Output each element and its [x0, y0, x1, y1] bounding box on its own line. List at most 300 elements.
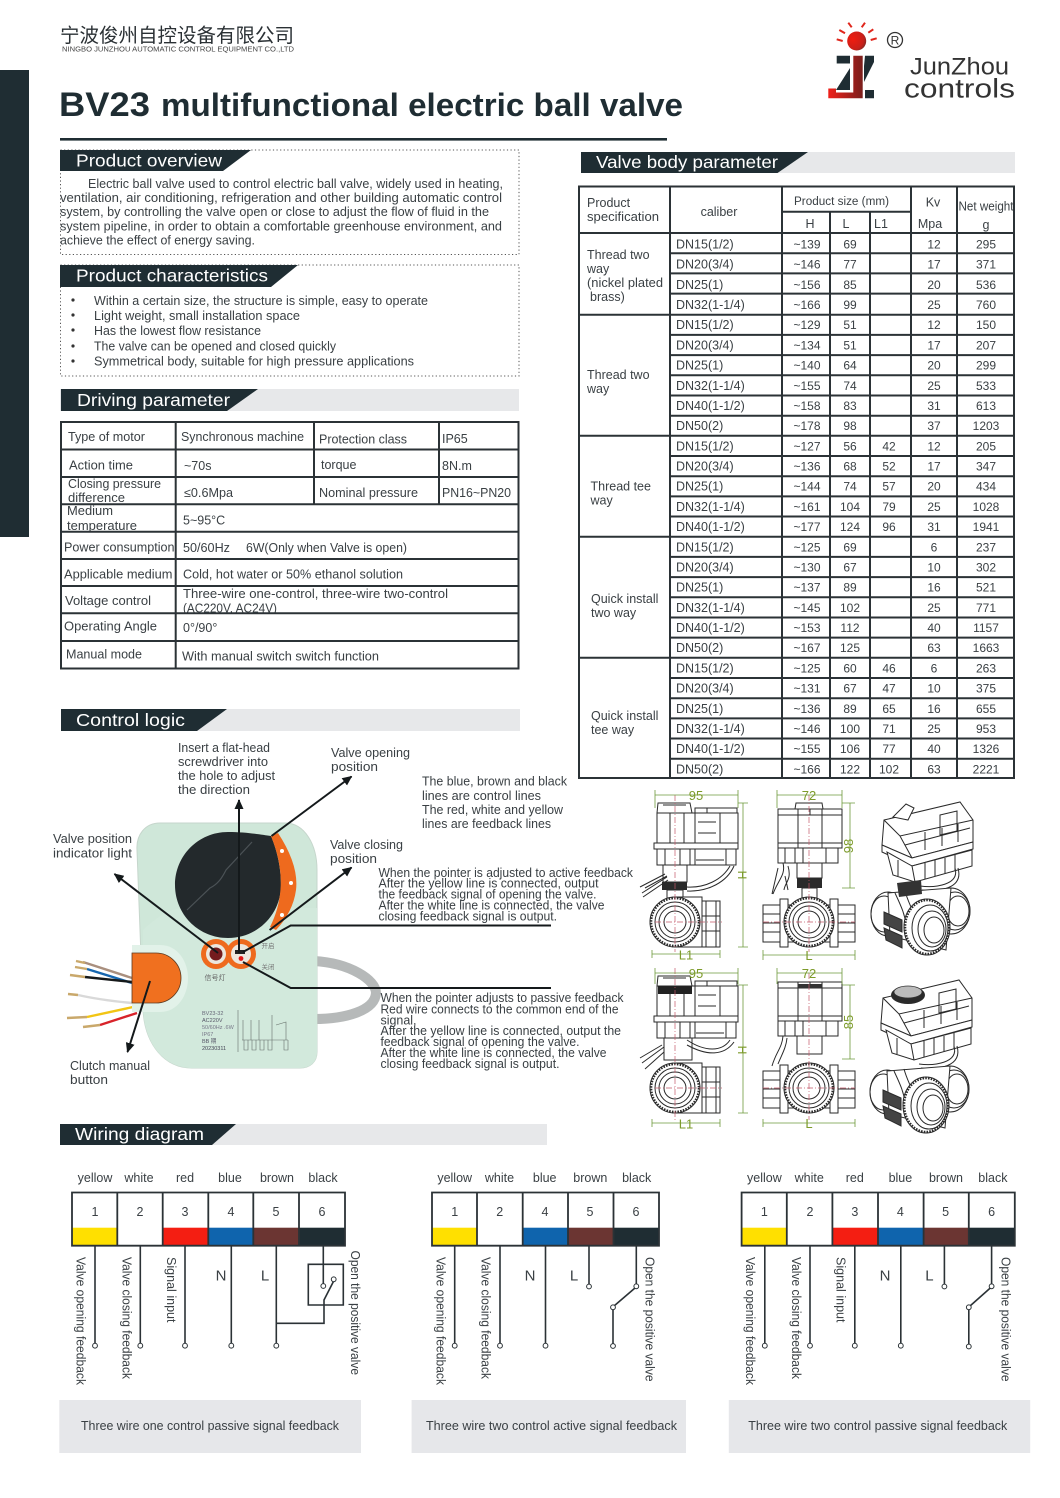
- net weight column: 1941: [973, 520, 1000, 534]
- H column: ~134: [793, 338, 821, 352]
- H column: ~131: [793, 682, 821, 696]
- caliber column: DN50(2): [676, 641, 723, 655]
- overview text: Electric ball valve used to control electric ball valve, widely used in heating,: [88, 177, 503, 191]
- table header: Kv: [926, 196, 941, 210]
- table header: [587, 196, 1014, 232]
- icon: sun: [837, 23, 877, 50]
- net weight column: 207: [976, 338, 996, 352]
- Kv column: 25: [927, 379, 941, 393]
- product specification labels: way: [586, 382, 610, 396]
- vertical labels: [74, 1250, 362, 1386]
- vertical labels: Open the positive valve: [642, 1257, 656, 1382]
- L column: 67: [843, 682, 857, 696]
- N and L labels: L: [570, 1268, 578, 1284]
- caliber column: DN20(3/4): [676, 560, 734, 574]
- caption bar: [59, 1400, 361, 1453]
- company name: NINGBO JUNZHOU AUTOMATIC CONTROL EQUIPMENT CO.,LTD: [62, 46, 294, 54]
- H column: ~155: [793, 742, 821, 756]
- Kv column: 16: [927, 702, 941, 716]
- H column: ~155: [793, 379, 821, 393]
- L1 column: 96: [882, 520, 896, 534]
- text: passive feedback note: Red wire connects to the common end of the: [380, 1002, 619, 1016]
- product specification labels: [586, 248, 663, 737]
- H column: ~130: [793, 560, 821, 574]
- H column: ~136: [793, 460, 821, 474]
- drawing: front view, knob version: 98: [841, 839, 856, 853]
- H column: ~161: [793, 500, 821, 514]
- device small labels: 20230311: [202, 1046, 226, 1052]
- table: driving parameter: Manual mode: [66, 648, 142, 662]
- net weight column: 1028: [973, 500, 1000, 514]
- table: driving parameter: Operating Angle: [64, 620, 157, 634]
- product specification labels: brass): [590, 290, 625, 304]
- H column: ~177: [793, 520, 821, 534]
- table: driving parameter: Voltage control: [65, 594, 151, 608]
- L1 column: 42: [882, 439, 896, 453]
- text: active feedback note: closing feedback signal is output.: [378, 910, 557, 924]
- caption bar: Three wire two control active signal feedback: [426, 1419, 678, 1433]
- table header: Product size (mm): [794, 196, 889, 208]
- caliber column: DN25(1): [676, 702, 723, 716]
- drawing: side view, dial version: [640, 966, 749, 1132]
- H column: ~125: [793, 661, 821, 675]
- L column: 74: [843, 480, 857, 494]
- wire colour names: yellow: [437, 1171, 473, 1185]
- Kv column: 16: [927, 581, 941, 595]
- caption bar: [729, 1400, 1030, 1453]
- L column: 124: [840, 520, 860, 534]
- Kv column: 25: [927, 500, 941, 514]
- caliber column: [676, 238, 745, 776]
- wiring diagram 2: [412, 1171, 686, 1453]
- Kv column: 20: [927, 480, 941, 494]
- caliber column: DN32(1-1/4): [676, 722, 745, 736]
- Kv column: 17: [927, 258, 941, 272]
- wires: [67, 961, 137, 1027]
- text: indicator light: indicator light: [53, 846, 133, 860]
- caliber column: DN25(1): [676, 278, 723, 292]
- net weight column: 1663: [973, 641, 1000, 655]
- net weight column: 1203: [973, 419, 1000, 433]
- arrows: control logic callouts: [114, 776, 551, 1052]
- caliber column: DN20(3/4): [676, 258, 734, 272]
- table: driving parameter: 5~95°C: [183, 514, 225, 528]
- panel: product overview: [60, 150, 519, 254]
- Kv column: 25: [927, 298, 941, 312]
- icon: registered mark: R: [891, 34, 900, 48]
- title: multifunctional electric ball valve: [161, 87, 683, 123]
- net weight column: 434: [976, 480, 996, 494]
- device small labels: BV23-32: [202, 1011, 223, 1017]
- table header: L1: [874, 217, 888, 231]
- wire colour names: yellow: [78, 1171, 113, 1185]
- vertical labels: Valve closing feedback: [120, 1257, 134, 1380]
- table: driving parameter: 0°/90°: [183, 621, 217, 635]
- overview text: system, by controlling the valve open or close to adjust the flow of fluid in the: [60, 205, 489, 219]
- H column: ~140: [793, 359, 821, 373]
- H column: ~158: [793, 399, 821, 413]
- table: driving parameter: temperature: [67, 519, 137, 533]
- L column: 51: [843, 318, 857, 332]
- terminal block: 1: [761, 1205, 768, 1219]
- net weight column: 771: [976, 601, 996, 615]
- caliber column: DN50(2): [676, 419, 723, 433]
- H column: ~136: [793, 702, 821, 716]
- table: driving parameter: Synchronous machine: [181, 430, 304, 444]
- vertical labels: Valve closing feedback: [789, 1257, 803, 1380]
- wire colour names: black: [308, 1171, 338, 1185]
- table: driving parameter: 6W(Only when Valve is open): [246, 541, 407, 555]
- L1 column: 46: [882, 661, 896, 675]
- terminal block: 6: [319, 1205, 326, 1219]
- N and L labels: N: [216, 1268, 226, 1284]
- net weight column: 347: [976, 460, 996, 474]
- caliber column: DN20(3/4): [676, 460, 734, 474]
- Kv column: 40: [927, 621, 941, 635]
- L1 column: 65: [882, 702, 896, 716]
- Kv column: 20: [927, 278, 941, 292]
- terminal block: 1: [92, 1205, 99, 1219]
- left side bar: [0, 70, 29, 537]
- drawing: front view, knob version: L: [805, 948, 813, 963]
- text: clutch manual button: Clutch manual: [70, 1059, 150, 1073]
- terminal block: 3: [851, 1205, 858, 1219]
- vertical labels: Signal input: [834, 1257, 848, 1323]
- orange clutch button: [132, 953, 181, 1003]
- caliber column: DN40(1-1/2): [676, 621, 745, 635]
- L column: 112: [840, 621, 860, 635]
- table header: g: [983, 218, 990, 232]
- drawing: isometric view, dial version: [870, 980, 972, 1133]
- caliber column: DN15(1/2): [676, 238, 734, 252]
- table: driving parameter: 8N.m: [442, 459, 472, 473]
- drawing: front view, dial version: 72: [802, 966, 816, 981]
- drawing: isometric view, knob version: [871, 802, 973, 955]
- drawing: side view, dial version: L1: [679, 1116, 693, 1132]
- text: wire colour note: lines are control lines: [422, 789, 541, 803]
- Kv column: 25: [927, 722, 941, 736]
- Kv column: 12: [927, 238, 941, 252]
- wires and switch: [452, 1246, 639, 1348]
- H column: ~153: [793, 621, 821, 635]
- Kv column: 31: [927, 520, 941, 534]
- caption bar: [412, 1400, 686, 1453]
- H column: ~137: [793, 581, 821, 595]
- text: valve opening position: position: [331, 760, 378, 774]
- device small labels: IP67: [202, 1032, 213, 1038]
- wire colour names: red: [176, 1171, 194, 1185]
- net weight column: 533: [976, 379, 996, 393]
- drawing: front view, dial version: [763, 966, 856, 1131]
- L column: 56: [843, 439, 857, 453]
- heading: wiring diagram: Wiring diagram: [75, 1124, 204, 1144]
- device small labels: [202, 941, 288, 1052]
- Kv column: [927, 238, 941, 776]
- L column: 98: [843, 419, 857, 433]
- terminal block: 4: [228, 1205, 235, 1219]
- table header: Mpa: [918, 217, 942, 231]
- table header: L: [843, 217, 850, 231]
- L column: [840, 238, 860, 776]
- heading: product characteristics: Product characteristics: [76, 266, 268, 286]
- text: passive feedback note: [380, 991, 624, 1071]
- wire colour names: [78, 1171, 338, 1185]
- wire colour names: brown: [573, 1171, 607, 1185]
- actuator device illustration: [67, 823, 376, 1068]
- net weight column: 302: [976, 560, 996, 574]
- net weight column: 536: [976, 278, 996, 292]
- device small labels: 关闭: [262, 962, 274, 971]
- wires and switch: [762, 1246, 994, 1349]
- terminal block: 4: [542, 1205, 549, 1219]
- table: driving parameter: [61, 422, 518, 668]
- text: passive feedback note: After the yellow line is connected, output the: [380, 1024, 621, 1038]
- title: BV23: [59, 86, 150, 124]
- text: valve closing position: [330, 838, 403, 866]
- Kv column: 17: [927, 460, 941, 474]
- vertical labels: Valve opening feedback: [74, 1257, 88, 1386]
- wire colour names: [747, 1171, 1008, 1185]
- text: active feedback note: [378, 866, 634, 924]
- icon: registered mark: [888, 32, 902, 48]
- wire colour names: red: [846, 1171, 864, 1185]
- table header: H: [805, 217, 815, 231]
- L1 column: [879, 439, 899, 776]
- terminal block: 2: [496, 1205, 503, 1219]
- terminal block: 6: [988, 1205, 995, 1219]
- button halo: [132, 945, 188, 1012]
- overview text: ventilation, air conditioning, refrigeration and other building automatic control: [60, 191, 502, 205]
- net weight column: 953: [976, 722, 996, 736]
- table header: Product: [587, 196, 631, 210]
- net weight column: 299: [976, 359, 996, 373]
- wire colour names: brown: [929, 1171, 963, 1185]
- H column: ~145: [793, 601, 821, 615]
- table: driving parameter: Closing pressure: [68, 477, 161, 491]
- product specification labels: (nickel plated: [587, 276, 663, 290]
- caliber column: DN15(1/2): [676, 439, 734, 453]
- net weight column: [973, 238, 1000, 776]
- vertical labels: Valve opening feedback: [433, 1257, 447, 1386]
- overview text: [60, 177, 503, 248]
- text: indicator light: [53, 832, 133, 860]
- wires and switch: [93, 1246, 343, 1348]
- table: driving parameter: Power consumption: [64, 540, 175, 554]
- terminal block: 5: [587, 1205, 594, 1219]
- H column: ~146: [793, 722, 821, 736]
- L column: 64: [843, 359, 857, 373]
- table: driving parameter: ~70s: [184, 459, 211, 473]
- Kv column: 17: [927, 338, 941, 352]
- vertical labels: [743, 1257, 1012, 1386]
- L column: 125: [840, 641, 860, 655]
- caliber column: DN32(1-1/4): [676, 379, 745, 393]
- N and L labels: L: [925, 1268, 934, 1284]
- table: driving parameter: PN16~PN20: [442, 486, 511, 500]
- N and L labels: N: [880, 1268, 890, 1284]
- Kv column: 63: [927, 641, 941, 655]
- text: valve opening position: Valve opening: [331, 746, 410, 760]
- heading: wiring diagram: [60, 1124, 547, 1145]
- caliber column: DN32(1-1/4): [676, 601, 745, 615]
- terminal block: 3: [182, 1205, 189, 1219]
- wiring diagram 1: [59, 1171, 362, 1453]
- characteristics list: Has the lowest flow resistance: [94, 324, 261, 338]
- text: indicator light: Valve position: [53, 832, 132, 846]
- net weight column: 150: [976, 318, 996, 332]
- Kv column: 10: [927, 682, 941, 696]
- wire colour names: white: [794, 1171, 824, 1185]
- terminal block: [72, 1192, 345, 1246]
- Kv column: 31: [927, 399, 941, 413]
- device small labels: 开启: [262, 941, 274, 950]
- table: driving parameter: Three-wire one-control, three-wire two-control: [183, 587, 448, 601]
- L1 column: 57: [882, 480, 896, 494]
- caption bar: Three wire two control passive signal feedback: [748, 1419, 1008, 1433]
- wire colour names: blue: [533, 1171, 557, 1185]
- caliber column: DN25(1): [676, 480, 723, 494]
- L column: 74: [843, 379, 857, 393]
- net weight column: 760: [976, 298, 996, 312]
- L column: 67: [843, 560, 857, 574]
- caliber column: DN32(1-1/4): [676, 500, 745, 514]
- caption bar: Three wire one control passive signal feedback: [81, 1419, 340, 1433]
- drawing: side view, knob version: L1: [679, 948, 693, 962]
- table: driving parameter: IP65: [442, 432, 468, 446]
- wire colour names: blue: [218, 1171, 242, 1185]
- L column: 68: [843, 460, 857, 474]
- H column: ~127: [793, 439, 821, 453]
- drawing: front view, knob version: [763, 788, 856, 963]
- wire colour names: black: [622, 1171, 652, 1185]
- H column: ~144: [793, 480, 821, 494]
- net weight column: 1326: [973, 742, 1000, 756]
- L1 column: 71: [882, 722, 896, 736]
- characteristics list: The valve can be opened and closed quickly: [94, 340, 337, 354]
- wire colour names: yellow: [747, 1171, 783, 1185]
- terminal block: 5: [273, 1205, 280, 1219]
- H column: ~129: [793, 318, 821, 332]
- vertical labels: Valve closing feedback: [479, 1257, 493, 1380]
- net weight column: 1157: [973, 621, 999, 635]
- L column: 104: [840, 500, 860, 514]
- terminal block: 2: [137, 1205, 144, 1219]
- N and L labels: N: [525, 1268, 535, 1284]
- H column: ~167: [793, 641, 821, 655]
- characteristics list: [71, 294, 428, 368]
- product specification labels: tee way: [591, 723, 635, 737]
- heading: control logic: Control logic: [76, 710, 185, 730]
- product specification labels: Quick install: [591, 592, 658, 606]
- L column: 102: [840, 601, 860, 615]
- text: screwdriver note: the hole to adjust: [178, 769, 276, 783]
- L column: 69: [843, 540, 857, 554]
- text: passive feedback note: feedback signal of opening the valve.: [380, 1035, 580, 1049]
- L1 column: 79: [882, 500, 896, 514]
- table: driving parameter: Nominal pressure: [319, 486, 418, 500]
- heading: driving parameter: Driving parameter: [77, 390, 230, 410]
- terminal block: [432, 1192, 659, 1246]
- wiring diagram 3: [729, 1171, 1030, 1453]
- Kv column: 63: [927, 762, 941, 776]
- net weight column: 375: [976, 682, 996, 696]
- Kv column: 12: [927, 439, 941, 453]
- L column: 60: [843, 661, 857, 675]
- caliber column: DN40(1-1/2): [676, 399, 745, 413]
- L column: 106: [840, 742, 860, 756]
- table: driving parameter: Cold, hot water or 50% ethanol solution: [183, 568, 403, 582]
- drawing: side view, dial version: 95: [689, 966, 703, 981]
- caliber column: DN15(1/2): [676, 318, 734, 332]
- device small labels: 50/60Hz .6W: [202, 1025, 235, 1031]
- wire colour names: blue: [889, 1171, 912, 1185]
- overview text: system pipeline, in order to obtain a comfortable greenhouse environment, and: [60, 220, 502, 234]
- L1 column: 52: [882, 460, 896, 474]
- brand name: controls: [904, 74, 1015, 104]
- heading: valve body parameter: [581, 152, 1015, 173]
- characteristics list: Light weight, small installation space: [94, 309, 300, 323]
- terminal block: 6: [633, 1205, 640, 1219]
- table: driving parameter: Action time: [69, 458, 133, 472]
- L1 column: 77: [882, 742, 896, 756]
- net weight column: 521: [976, 581, 996, 595]
- housing: [137, 823, 317, 1068]
- L column: 89: [843, 702, 857, 716]
- heading: control logic: [61, 709, 520, 731]
- text: active feedback note: the feedback signal of opening the valve.: [378, 888, 596, 902]
- device small labels: 信号灯: [204, 973, 226, 982]
- net weight column: 371: [976, 258, 996, 272]
- Kv column: 37: [927, 419, 941, 433]
- product specification labels: Quick install: [591, 709, 658, 723]
- text: wire colour note: lines are feedback lines: [422, 817, 551, 831]
- caliber column: DN32(1-1/4): [676, 298, 745, 312]
- Kv column: 25: [927, 601, 941, 615]
- terminal block: 4: [897, 1205, 904, 1219]
- L column: 77: [843, 258, 857, 272]
- caliber column: DN20(3/4): [676, 338, 734, 352]
- company name: 宁波俊州自控设备有限公司: [60, 25, 294, 47]
- logo: [828, 23, 1015, 104]
- text: active feedback note: When the pointer is adjusted to active feedback: [378, 866, 634, 880]
- product specification labels: Thread two: [587, 248, 650, 262]
- net weight column: 655: [976, 702, 996, 716]
- heading: valve body parameter: Valve body parameter: [596, 152, 778, 172]
- caliber column: DN15(1/2): [676, 540, 734, 554]
- characteristics list: Within a certain size, the structure is simple, easy to operate: [94, 294, 428, 308]
- product specification labels: Thread two: [587, 368, 650, 382]
- vertical labels: Valve opening feedback: [743, 1257, 757, 1386]
- drawing: side view, dial version: H: [735, 1046, 749, 1054]
- characteristics list: Symmetrical body, suitable for high pressure applications: [94, 354, 414, 368]
- heading: product characteristics: [60, 265, 298, 287]
- text: clutch manual button: button: [70, 1073, 108, 1087]
- feedback selector: [226, 939, 256, 969]
- table: driving parameter: Medium: [67, 504, 113, 518]
- drawing: front view, dial version: L: [805, 1116, 813, 1131]
- L column: 51: [843, 338, 857, 352]
- caliber column: DN25(1): [676, 581, 723, 595]
- L column: 83: [843, 399, 857, 413]
- vertical labels: [433, 1257, 656, 1386]
- dial: [175, 832, 281, 938]
- net weight column: 613: [976, 399, 996, 413]
- wire colour names: white: [123, 1171, 154, 1185]
- brand name: [904, 54, 1015, 104]
- H column: ~156: [793, 278, 821, 292]
- N and L labels: L: [261, 1268, 269, 1284]
- terminal block: 2: [807, 1205, 814, 1219]
